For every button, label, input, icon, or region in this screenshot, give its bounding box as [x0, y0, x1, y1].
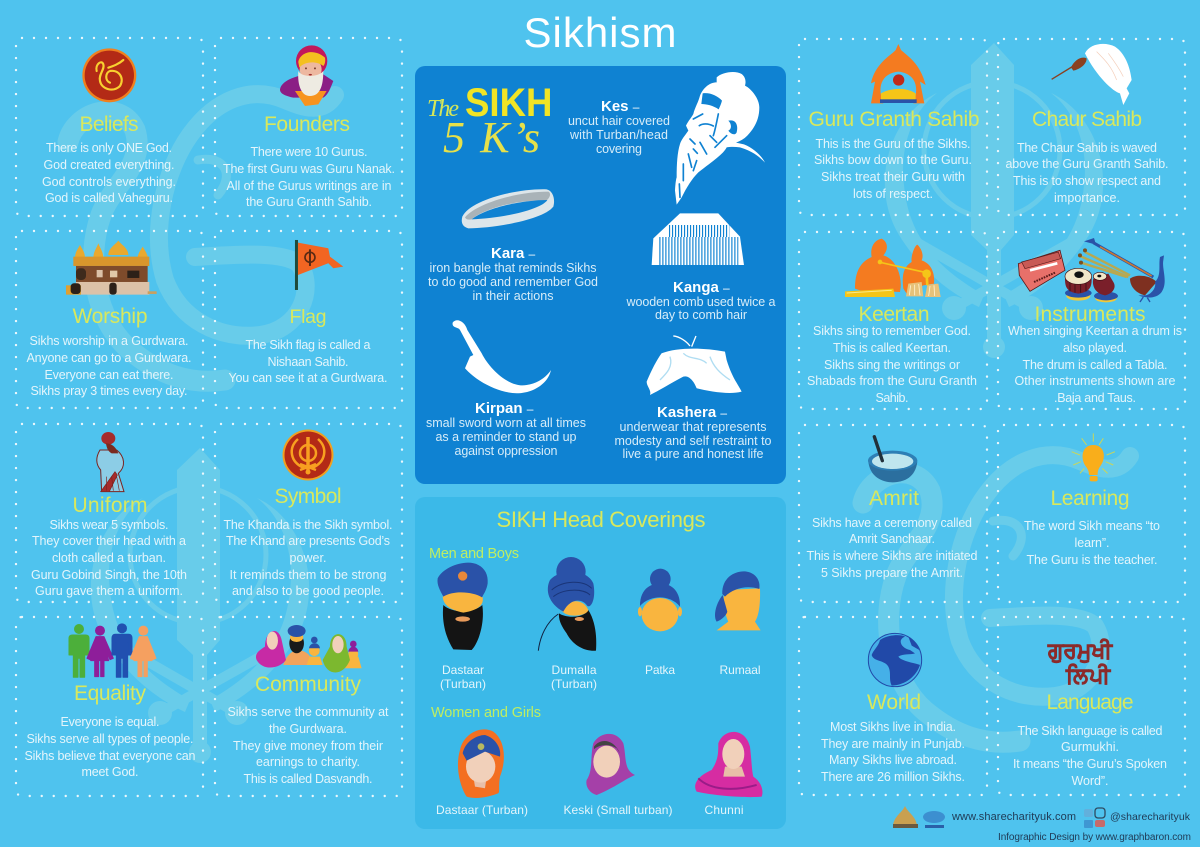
- text block: [31, 518, 187, 598]
- text block: [228, 338, 388, 385]
- heading: the sikh 5 ks: 5 K’s: [443, 113, 540, 162]
- icon: rumaal: [715, 571, 761, 630]
- text block: Guru gave them a uniform.: [35, 584, 183, 598]
- heading: the sikh 5 ks: [427, 81, 552, 162]
- icon: keski: [586, 734, 635, 795]
- panel: world: [799, 617, 987, 795]
- text block: God is called Vaheguru.: [45, 191, 173, 205]
- heading: Amrit: [869, 487, 919, 510]
- panel: head coverings: [415, 497, 786, 829]
- text: kara: iron bangle that reminds Sikhs: [430, 261, 596, 275]
- text block: Most Sikhs live in India.: [830, 720, 956, 734]
- icon: social media: [1084, 808, 1105, 828]
- icon: kanga comb: [652, 213, 744, 265]
- text block: It reminds them to be strong: [230, 568, 387, 582]
- text: kara: [428, 245, 598, 303]
- heading: Guru Granth Sahib: [808, 108, 980, 131]
- labels: women and girls: Dastaar (Turban): [436, 803, 528, 817]
- text block: [224, 518, 392, 598]
- text block: They give money from their: [233, 739, 383, 753]
- design credit: Infographic Design by www.graphbaron.com: [998, 832, 1191, 843]
- labels: men and boys: Dumalla: [552, 663, 597, 677]
- icon: guru granth sahib canopy: [871, 44, 926, 103]
- heading: Language: [1046, 691, 1134, 714]
- text block: [807, 324, 977, 405]
- icon: chaur whisk: [1052, 44, 1132, 105]
- labels: women and girls: Chunni: [704, 803, 744, 817]
- text block: This is where Sikhs are initiated: [806, 549, 978, 563]
- icon: share logo: [923, 811, 945, 828]
- text block: Sikhs serve the community at: [228, 705, 389, 719]
- text block: Sahib.: [876, 391, 908, 405]
- panel: uniform: [16, 424, 203, 602]
- text block: Nishaan Sahib.: [268, 355, 348, 369]
- text block: When singing Keertan a drum is: [1008, 324, 1182, 338]
- text block: There were 10 Gurus.: [250, 145, 368, 159]
- text: kirpan: [426, 400, 586, 458]
- panel: equality: [16, 617, 203, 796]
- text block: [814, 137, 972, 201]
- website: www.sharecharityuk.com: [951, 811, 1076, 823]
- icon: kes head silhouette: [675, 72, 765, 205]
- heading: SIKH Head Coverings: [496, 507, 706, 532]
- text block: The Sikh language is called: [1018, 724, 1163, 738]
- icon: globe: [868, 633, 922, 687]
- text block: Amrit Sanchaar.: [849, 532, 935, 546]
- text block: God created everything.: [44, 158, 174, 172]
- text block: They cover their head with a: [32, 534, 186, 548]
- labels: men and boys: Rumaal: [720, 663, 760, 677]
- text block: [1013, 724, 1167, 788]
- text: kanga: Kanga –: [673, 279, 730, 296]
- text: kanga: day to comb hair: [655, 308, 747, 322]
- icon: amrit bowl: [868, 437, 917, 482]
- text: kashera: [614, 404, 772, 461]
- panel: language: [998, 617, 1185, 795]
- text block: Shabads from the Guru Granth: [807, 374, 977, 388]
- watermark: ik onkar left: [68, 94, 335, 381]
- labels: men and boys: [440, 663, 760, 691]
- icon: light bulb: [1072, 433, 1115, 481]
- text: kirpan: Kirpan –: [475, 400, 534, 417]
- icon: harmonium tabla and taus: [1018, 238, 1165, 302]
- text block: Everyone is equal.: [60, 715, 160, 729]
- text block: This is to show respect and: [1013, 174, 1161, 188]
- text block: [821, 720, 965, 784]
- text block: Sikhs serve all types of people.: [26, 732, 194, 746]
- text: kes: [568, 98, 670, 156]
- text block: [1006, 141, 1168, 205]
- text block: Sikhs treat their Guru with: [821, 170, 965, 184]
- text: kara: Kara –: [491, 245, 536, 262]
- text block: lots of respect.: [853, 187, 933, 201]
- text block: There is only ONE God.: [46, 141, 172, 155]
- watermark: khanda right: [885, 43, 1103, 358]
- heading: Keertan: [858, 303, 930, 326]
- icon: nishaan sahib flag: [295, 240, 343, 290]
- text: kirpan: against oppression: [454, 444, 558, 458]
- text: kashera: underwear that represents: [620, 420, 766, 434]
- labels: men and boys: (Turban): [551, 677, 597, 691]
- panel: keertan: [799, 232, 987, 409]
- text: kirpan: as a reminder to stand up: [436, 430, 577, 444]
- heading: Instruments: [1034, 303, 1146, 326]
- text block: the Guru Granth Sahib.: [246, 195, 372, 209]
- labels: women and girls: Keski (Small turban): [564, 803, 672, 817]
- text block: importance.: [1054, 191, 1120, 205]
- panel: community: [215, 617, 402, 796]
- text block: The word Sikh means “to: [1024, 519, 1160, 533]
- heading: World: [867, 691, 921, 714]
- text: kashera: modesty and self restraint to: [614, 434, 772, 448]
- text block: The drum is called a Tabla.: [1022, 358, 1168, 372]
- panel: chaur sahib: [998, 39, 1185, 215]
- text block: Many Sikhs live abroad.: [829, 753, 957, 767]
- text block: [1008, 324, 1182, 405]
- text block: Anyone can go to a Gurdwara.: [26, 351, 192, 365]
- text: kanga: [626, 279, 776, 322]
- icon: kara bangle: [462, 189, 554, 228]
- icon: gurmukhi lipi lettering: ਲਿਪੀ: [1065, 663, 1111, 688]
- labels: men and boys: Dastaar: [442, 663, 484, 677]
- icon: gurmukhi lipi lettering: ਗੁਰਮੁਖੀ: [1047, 638, 1113, 663]
- text block: [42, 141, 176, 205]
- icon: four people: [69, 623, 156, 677]
- panel: learning: [998, 425, 1185, 602]
- icon: golden temple: [66, 241, 157, 295]
- icon: women dastaar: [458, 729, 504, 798]
- labels: women and girls: [436, 803, 744, 817]
- panel: symbol: [215, 424, 402, 602]
- text block: cloth called a turban.: [52, 551, 166, 565]
- text block: The Sikh flag is called a: [246, 338, 371, 352]
- text block: Sikhs have a ceremony called: [812, 516, 972, 530]
- text block: [26, 334, 192, 398]
- heading: Flag: [290, 306, 326, 328]
- heading: Equality: [74, 682, 146, 705]
- text block: It means “the Guru’s Spoken: [1013, 757, 1167, 771]
- text block: The Guru is the teacher.: [1026, 553, 1158, 567]
- panel: founders: [215, 38, 402, 216]
- text: kes: Kes –: [601, 98, 640, 115]
- panel: instruments: [998, 232, 1185, 409]
- heading: Uniform: [72, 494, 148, 517]
- text: kanga: wooden comb used twice a: [626, 295, 776, 309]
- text block: Sikhs bow down to the Guru.: [814, 153, 972, 167]
- title: Sikhism: [524, 9, 676, 56]
- text block: 5 Sikhs prepare the Amrit.: [821, 566, 963, 580]
- text block: above the Guru Granth Sahib.: [1006, 157, 1168, 171]
- text: kirpan: small sword worn at all times: [426, 416, 586, 430]
- text: kes: covering: [596, 142, 642, 156]
- labels: men and boys: Patka: [645, 663, 675, 677]
- text block: Sikhs worship in a Gurdwara.: [30, 334, 188, 348]
- heading: Worship: [72, 305, 148, 328]
- watermark: ik onkar right: [863, 455, 1130, 742]
- heading: Beliefs: [80, 113, 138, 136]
- text block: Gurmukhi.: [1061, 740, 1119, 754]
- text block: God controls everything.: [42, 175, 176, 189]
- text block: Sikhs pray 3 times every day.: [30, 384, 188, 398]
- social handle: @sharecharityuk: [1110, 811, 1191, 823]
- heading: the sikh 5 ks: The: [427, 96, 459, 122]
- text block: [1024, 519, 1160, 567]
- text block: This is called Keertan.: [833, 341, 951, 355]
- text block: This is the Guru of the Sikhs.: [816, 137, 970, 151]
- text block: [24, 715, 196, 779]
- text block: learn”.: [1074, 536, 1110, 550]
- icon: keertan musicians: [845, 239, 941, 297]
- text block: [806, 516, 978, 580]
- text: kes: uncut hair covered: [568, 114, 670, 128]
- icon: guru nanak portrait: [280, 45, 333, 106]
- panel: amrit: [799, 425, 987, 602]
- icon: dastaar turban: [437, 563, 488, 650]
- subheading: men and boys: Men and Boys: [429, 546, 519, 562]
- text block: All of the Gurus writings are in: [226, 179, 392, 193]
- text block: .Baja and Taus.: [1054, 391, 1136, 405]
- panel: worship: [16, 231, 203, 408]
- text block: Sikhs wear 5 symbols.: [50, 518, 168, 532]
- text block: The Khanda is the Sikh symbol.: [224, 518, 392, 532]
- subheading: women and girls: Women and Girls: [431, 705, 541, 721]
- text block: Sikhs believe that everyone can: [24, 749, 196, 763]
- text block: The Chaur Sahib is waved: [1017, 141, 1157, 155]
- heading: Symbol: [274, 485, 342, 508]
- text: kes: with Turban/head: [569, 128, 668, 142]
- text: kara: to do good and remember God: [428, 275, 598, 289]
- icon: chunni: [695, 732, 762, 797]
- labels: men and boys: (Turban): [440, 677, 486, 691]
- icon: khanda medallion: [282, 430, 334, 480]
- text block: the Gurdwara.: [269, 722, 347, 736]
- text block: and also to be good people.: [232, 584, 384, 598]
- panel: the sikh 5 ks: [415, 66, 786, 484]
- text block: also played.: [1063, 341, 1127, 355]
- icon: kirpan sword: [453, 320, 551, 393]
- text block: power.: [290, 551, 326, 565]
- text block: There are 26 million Sikhs.: [821, 770, 965, 784]
- footer: [893, 806, 1191, 843]
- icon: patka: [638, 569, 682, 631]
- text block: Everyone can eat there.: [44, 368, 174, 382]
- text block: [223, 145, 395, 209]
- text block: They are mainly in Punjab.: [821, 737, 965, 751]
- icon: guru gobind singh figure: [97, 432, 124, 492]
- heading: the sikh 5 ks: SIKH: [465, 81, 552, 125]
- heading: Chaur Sahib: [1032, 108, 1142, 131]
- heading: Community: [255, 673, 362, 696]
- text block: Sikhs sing to remember God.: [813, 324, 971, 338]
- text block: The Khand are presents God’s: [226, 534, 390, 548]
- icon: dumalla turban: [538, 557, 596, 651]
- text block: [228, 705, 389, 786]
- text block: Other instruments shown are: [1014, 374, 1176, 388]
- panel: beliefs: [16, 38, 203, 216]
- text block: Guru Gobind Singh, the 10th: [31, 568, 187, 582]
- text block: meet God.: [82, 765, 138, 779]
- text: kashera: Kashera –: [657, 404, 727, 421]
- icon: kashera: [647, 336, 742, 395]
- icon: temple logo: [893, 806, 918, 828]
- text block: Word”.: [1072, 774, 1108, 788]
- icon: gurmukhi lipi lettering: [1047, 638, 1113, 688]
- text: kara: in their actions: [472, 289, 554, 303]
- watermark: khanda left: [91, 448, 309, 763]
- text block: This is called Dasvandh.: [244, 772, 372, 786]
- icon: ik onkar medallion: [82, 48, 136, 102]
- text block: You can see it at a Gurdwara.: [228, 371, 388, 385]
- heading: Learning: [1050, 487, 1130, 510]
- panel: flag: [215, 231, 402, 408]
- text block: earnings to charity.: [256, 755, 360, 769]
- text: kashera: live a pure and honest life: [622, 447, 764, 461]
- panel: guru granth sahib: [799, 39, 987, 215]
- icon: community group: [256, 625, 362, 672]
- heading: Founders: [264, 113, 350, 136]
- text block: The first Guru was Guru Nanak.: [223, 162, 395, 176]
- text block: Sikhs sing the writings or: [824, 358, 960, 372]
